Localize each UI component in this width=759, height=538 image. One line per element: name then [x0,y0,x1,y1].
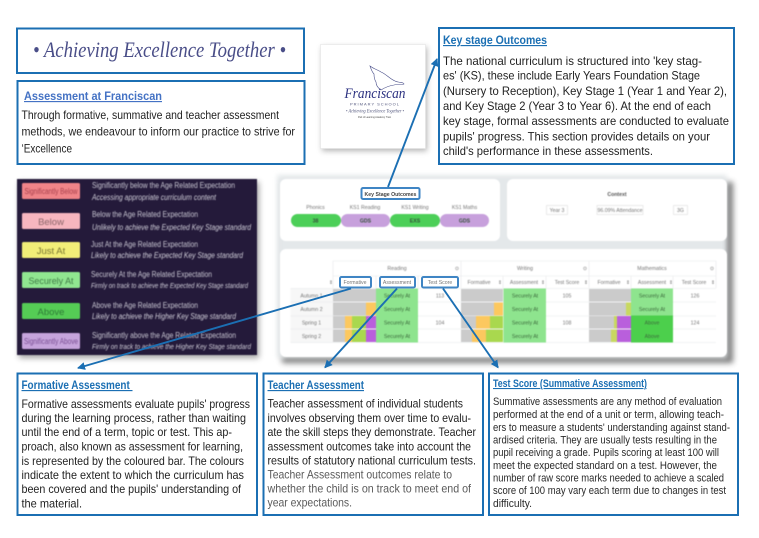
assessment cells: Securely At [639,294,666,300]
legend row: below: Below [38,217,64,228]
table headers: ⇕ [626,280,630,286]
logo card: Franciscan Primary School: Franciscan [344,86,406,102]
text block: assessment intro: ‘Excellence [22,142,72,156]
text block: formative description: during the learning process, rather than waiting [22,412,246,425]
heading: assessment at Franciscan: Assessment at Franciscan [24,91,162,103]
outcome pills: GDS [459,218,471,224]
table headers: ⇕ [711,280,715,286]
table headers: ⇕ [669,280,673,286]
panel: attainment legend [17,179,259,358]
text block: formative description: is represented by the coloured bar. The colours [22,455,244,468]
text block: teacher description: ate the skill steps they demonstrate. Teacher [268,426,476,439]
highlight: assessment column: Assessment [383,280,412,286]
text block: key stage description: pupils' progress. This section provides details on your [443,130,710,144]
text block: teacher description: whether the child is on track to meet end of [267,482,472,496]
table row labels: Spring 1 [302,320,321,326]
logo card: Franciscan Primary School: Part of Learning Academy Trust [358,115,391,119]
table headers: Reading [387,266,407,272]
outcome pills [291,214,489,227]
panel: assessment at Franciscan [18,81,304,164]
highlight: key stage outcomes label: Key Stage Outcomes [365,192,417,198]
arrow: to formative assessment [78,288,351,368]
panel: pupil report dashboard [277,175,733,363]
banner: motto [17,28,304,73]
outcome pills: 38 [313,218,318,224]
logo card: Franciscan Primary School [320,44,427,151]
table headers: ⇕ [584,280,588,286]
arrow: to teacher assessment [325,288,397,368]
panel: teacher assessment [264,374,483,515]
legend row: significantly below: Accessing appropriate curriculum content [91,193,217,202]
panel: key stage outcomes [439,28,734,164]
table headers: ⇕ [498,280,502,286]
text block: summative description: difficulty. [493,498,532,510]
test scores: 113 [436,294,444,300]
icon: dove [370,66,404,90]
text block: formative description: until the end of a term, topic or test. This ap- [22,426,232,439]
text block: key stage description: key stage, formal assessments are conducted to evaluate [443,115,729,128]
card: assessment table [280,249,727,357]
arrow: to key stage outcomes [388,59,437,187]
legend row: above: Likely to achieve the Higher Key Stage standard [92,312,236,321]
text block: key stage description: and Key Stage 2 (Year 3 to Year 6). At the end of each [443,100,711,113]
test scores [436,294,699,326]
test scores: 105 [563,294,571,300]
mathematics formative bars [589,289,631,342]
logo card: Franciscan Primary School: PRIMARY SCHOOL [350,102,400,106]
legend row: above: Above the Age Related Expectation [92,301,198,310]
assessment cells: Securely At [512,307,539,313]
table headers: Formative [467,280,491,286]
text block: summative description [493,396,730,510]
text block: assessment intro [22,109,295,156]
text block: summative description: score of 100 may vary each term due to changes in test [493,485,726,497]
table headers: Assessment [510,280,539,286]
text block: summative description: meet the expected standard on a test. However, the [493,460,717,472]
text block: formative description: been covered and the pupils' understanding of [22,483,242,496]
text block: teacher description: involves observing them over time to evalu- [268,412,471,425]
text block: assessment intro: Through formative, summative and teacher assessment [22,109,280,122]
legend row: securely at: Firmly on track to achieve the Expected Key Stage standard [91,281,249,290]
legend row: significantly above: Significantly above the Age Related Expectation [92,331,236,340]
outcome pills: EXS [410,218,421,224]
panel: test score summative assessment [489,374,738,515]
table headers: ⇕ [541,280,545,286]
assessment cells: Securely At [384,294,411,300]
table row labels: Autumn 2 [300,307,323,313]
table headers [329,261,716,288]
test scores: 126 [691,294,699,300]
card: context [507,179,727,241]
table row labels: Autumn 1 [300,294,323,300]
text block: key stage description: child's performance in these assessments. [443,145,653,158]
text block: summative description: number of raw score marks needed to achieve a scaled [493,472,724,484]
text block: summative description: pupil receiving a grade. Pupils scoring at least 100 will [493,447,719,459]
assessment cells: Securely At [384,320,411,326]
legend row: above [22,301,236,321]
card: context: Context [607,192,627,198]
pill labels: KS1 Maths [452,205,478,211]
text block: assessment intro: methods, we endeavour to inform our practice to strive for [22,126,295,138]
legend row: securely at: Securely At [28,276,74,287]
legend row: securely at [22,270,249,290]
assessment cells: Above [645,334,659,340]
legend row: significantly above [22,331,252,351]
assessment cells: Securely At [384,334,411,340]
text block: teacher description: results of statutory national curriculum tests. [268,454,476,468]
assessment cells: Securely At [512,334,539,340]
legend row: significantly below: Significantly below the Age Related Expectation [92,181,235,190]
pill labels: KS1 Writing [401,205,429,211]
legend row: significantly above: Firmly on track to achieve the Higher Key Stage standard [92,342,252,351]
text block: teacher description: Teacher Assessment outcomes relate to [268,468,452,482]
highlight: assessment column [380,277,415,288]
text block: summative description: ers to measure a students' understanding against stand- [493,422,730,434]
legend row: just at: Just At [37,246,66,257]
text block: formative description: Formative assessments evaluate pupils' progress [22,398,250,411]
table headers: ⇕ [329,280,333,286]
highlight: test score column [422,277,458,288]
highlight: key stage outcomes label [362,188,420,199]
arrow: to test score [443,288,498,368]
text block: teacher description [267,398,476,510]
outcome pills: GDS [360,218,372,224]
highlight: formative column: Formative [343,280,367,286]
table headers: Writing [517,266,533,272]
assessment cells: Securely At [512,320,539,326]
assessment cells: Securely At [639,307,666,313]
legend row: below [22,210,251,232]
text block: teacher description: assessment outcomes take into account the [268,440,471,454]
pill labels: Phonics [306,205,325,211]
text block: formative description: proach, also known as assessment for learning, [22,440,243,454]
panel: formative assessment [18,374,257,515]
card: context: 96.09% Attendance [598,208,643,214]
highlight: formative column [340,277,371,288]
text block: teacher description: year expectations. [268,496,352,510]
table row labels [290,288,716,342]
test scores: 124 [691,320,699,326]
text block: teacher description: Teacher assessment of individual students [268,398,463,410]
legend row: below: Below the Age Related Expectation [92,210,198,219]
legend row: securely at: Securely At the Age Related Expectation [91,270,212,279]
table headers: Formative [597,280,621,286]
reading formative bars [333,289,376,342]
card: key stage outcomes summary [280,179,500,241]
assessment cells: Securely At [512,294,539,300]
heading: formative assessment: Formative Assessment [22,380,132,392]
assessment cells: Securely At [384,307,411,313]
table headers: ⊙ [583,266,587,272]
text block: formative description [22,398,250,510]
logo card: Franciscan Primary School: • Achieving Excellence Together • [346,110,404,114]
pill labels [306,205,478,211]
table headers: ⊙ [710,266,714,272]
text block: summative description: Summative assessments are any method of evaluation [493,396,722,408]
table headers: Test Score [555,280,579,286]
heading: teacher assessment: Teacher Assessment [268,380,364,392]
card: context: 3G [677,208,684,214]
test scores: 108 [563,320,571,326]
text block: summative description: performed at the end of a unit or term, allowing teach- [493,409,724,421]
text block: key stage description: The national curriculum is structured into 'key stag- [443,55,702,68]
writing formative bars [461,289,503,342]
assessment cells: Above [645,320,659,326]
table headers: Mathematics [637,266,667,272]
legend row: significantly below: Significantly Below [24,187,78,196]
table headers: Test Score [682,280,706,286]
heading: key stage outcomes: Key stage Outcomes [443,35,547,47]
text block: formative description: indicate the extent to which the curriculum has [22,469,244,482]
text block: key stage description: (Nursery to Reception), Key Stage 1 (Year 1 and Year 2), [443,85,727,98]
pill labels: KS1 Reading [350,205,380,211]
text block: key stage description [443,55,729,158]
legend row: significantly above: Significantly Above [24,337,78,346]
assessment cells [376,288,673,342]
banner: motto: • Achieving Excellence Together • [33,37,286,62]
legend row: just at: Likely to achieve the Expected Key Stage standard [91,251,243,260]
legend row: just at [22,240,243,260]
legend row: below: Unlikely to achieve the Expected Key Stage standard [92,223,251,232]
legend row: above: Above [38,307,64,318]
test scores: 104 [436,320,444,326]
table headers: Assessment [638,280,667,286]
text block: key stage description: es' (KS), these include Early Years Foundation Stage [443,70,700,82]
card: context: Year 3 [550,208,565,214]
highlight: test score column: Test Score [428,280,452,286]
heading: test score: Test Score (Summative Assessment) [493,378,647,390]
table row labels: Spring 2 [302,334,321,340]
text block: formative description: the material. [22,498,82,510]
legend row: just at: Just At the Age Related Expectation [91,240,198,249]
legend row: significantly below [22,181,235,202]
table headers: ⊙ [455,266,459,272]
text block: summative description: ardised criteria. They are usually tests resulting in the [493,434,717,446]
